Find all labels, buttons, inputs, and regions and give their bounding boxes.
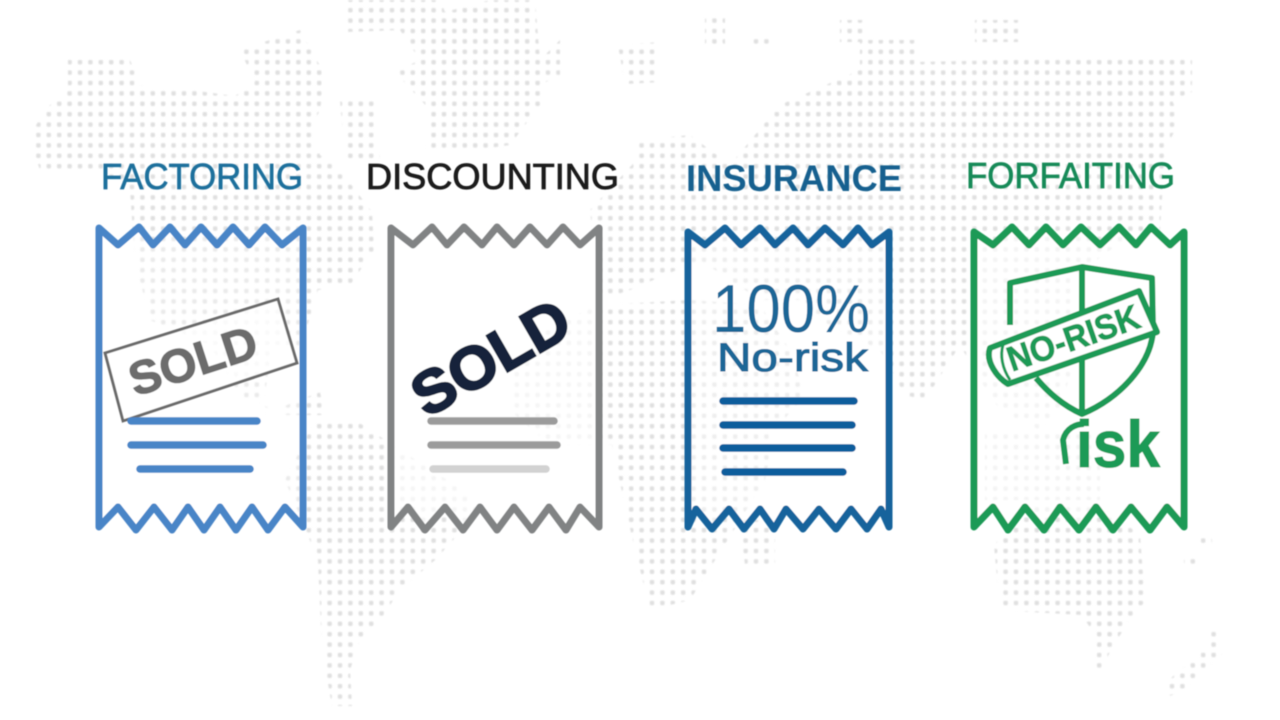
heading: discounting: DISCOUNTING xyxy=(366,156,619,197)
map: South America xyxy=(285,420,480,706)
receipt outline: insurance xyxy=(688,228,889,529)
panel: forfaiting xyxy=(966,155,1184,530)
icon: shield xyxy=(1010,267,1153,414)
stamp: SOLD in outlined box xyxy=(105,299,297,421)
map: Australia xyxy=(994,505,1145,668)
text: No-risk: No-risk xyxy=(717,336,869,380)
map: Madagascar xyxy=(740,520,775,565)
text: torn risk word: isk xyxy=(1076,407,1160,481)
panel: discounting xyxy=(366,156,619,530)
map: Maritime Southeast Asia xyxy=(985,430,1100,500)
heading: forfaiting: FORFAITING xyxy=(966,155,1175,196)
receipt outline: discounting xyxy=(391,227,599,530)
receipt outline: forfaiting xyxy=(974,227,1184,530)
panel: insurance xyxy=(686,158,902,529)
heading: factoring: FACTORING xyxy=(101,156,303,197)
panel: factoring xyxy=(99,156,303,530)
receipt outline: factoring xyxy=(99,227,303,530)
map: Africa xyxy=(510,300,805,610)
icon: no-risk ribbon: NO-RISK xyxy=(1002,298,1145,379)
stamp: SOLD: SOLD xyxy=(400,286,582,430)
map: Iceland and northern islands xyxy=(618,15,1018,84)
text lines: factoring xyxy=(131,421,263,469)
map: North America xyxy=(35,30,374,415)
map: Eurasia xyxy=(590,40,1192,430)
text lines: discounting xyxy=(431,421,557,469)
stamp: SOLD in outlined box: SOLD xyxy=(122,315,264,406)
map: Greenland and Arctic islands xyxy=(340,0,560,160)
heading: insurance: INSURANCE xyxy=(686,158,902,199)
text lines: insurance xyxy=(723,401,854,472)
text: 100%: 100% xyxy=(712,271,870,347)
map: Pacific islands xyxy=(1164,535,1222,698)
